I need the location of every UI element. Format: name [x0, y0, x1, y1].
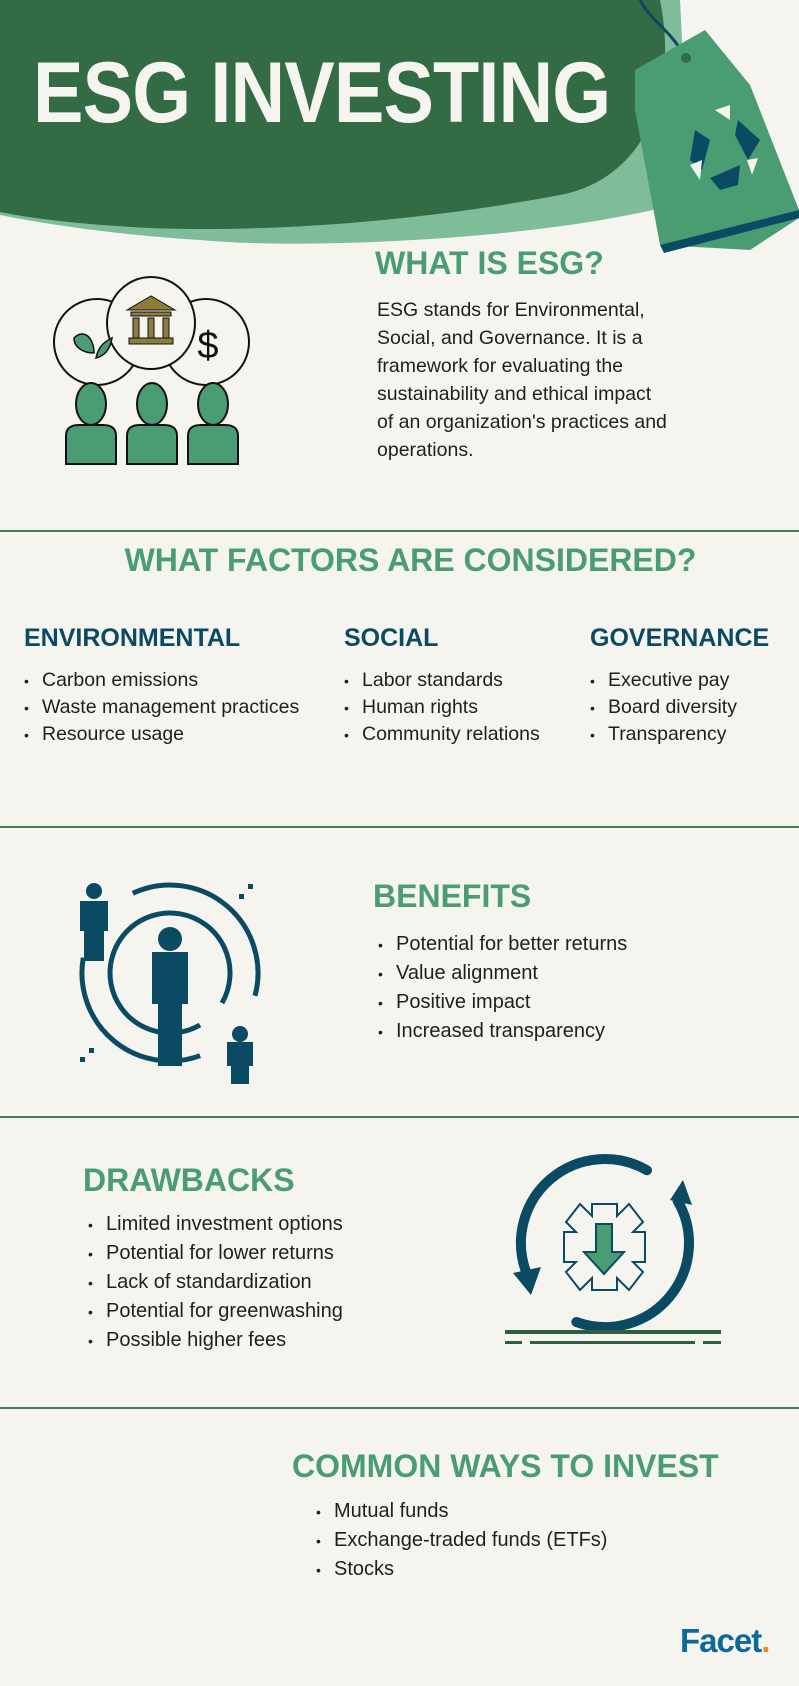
list: drawbacks: Limited investment options — [106, 1213, 343, 1235]
column: governance — [590, 624, 769, 745]
list: benefits — [378, 933, 627, 1042]
column: environmental — [24, 624, 299, 745]
logo: facet: Facet. — [680, 1622, 769, 1659]
column: governance: Board diversity — [608, 696, 737, 718]
list: ways to invest: Stocks — [334, 1558, 394, 1580]
icon: gear with cycle arrows — [505, 1154, 721, 1344]
list: drawbacks: Lack of standardization — [106, 1271, 312, 1293]
column: environmental: Resource usage — [42, 723, 184, 745]
column: governance: Executive pay — [608, 669, 729, 691]
column: social: SOCIAL — [344, 624, 438, 652]
title: ESG INVESTING — [33, 45, 610, 141]
list: drawbacks: Possible higher fees — [106, 1329, 286, 1351]
icon: recycle tag — [635, 0, 799, 253]
heading: benefits: BENEFITS — [373, 878, 531, 914]
list: benefits: Value alignment — [396, 962, 538, 984]
column: social — [344, 624, 540, 745]
heading: factors: WHAT FACTORS ARE CONSIDERED? — [125, 542, 696, 578]
heading: what is esg: WHAT IS ESG? — [375, 245, 604, 281]
column: governance: Transparency — [608, 723, 726, 745]
column: social: Community relations — [362, 723, 540, 745]
column: environmental: Carbon emissions — [42, 669, 198, 691]
icon: person in circles — [79, 882, 261, 1084]
icon: ESG people and circles: $ — [197, 325, 219, 367]
list: ways to invest: Exchange-traded funds (ETFs) — [334, 1529, 607, 1551]
heading: drawbacks: DRAWBACKS — [83, 1162, 295, 1198]
list: benefits: Increased transparency — [396, 1020, 605, 1042]
list: ways to invest — [316, 1500, 607, 1580]
column: environmental: ENVIRONMENTAL — [24, 624, 240, 652]
column: social: Human rights — [362, 696, 478, 718]
heading: common ways: COMMON WAYS TO INVEST — [292, 1448, 719, 1484]
list: drawbacks: Potential for lower returns — [106, 1242, 334, 1264]
text: esg definition: ESG stands for Environmental, Social, and Governance. It is a framework for evaluating the sustainability and ethical impact of an organization's practices and operations. — [377, 299, 667, 461]
icon: ESG people and circles — [53, 276, 250, 465]
list: drawbacks: Potential for greenwashing — [106, 1300, 343, 1322]
list: drawbacks — [88, 1213, 343, 1351]
column: environmental: Waste management practices — [42, 696, 299, 718]
list: benefits: Positive impact — [396, 991, 530, 1013]
header banner — [0, 0, 682, 244]
list: ways to invest: Mutual funds — [334, 1500, 449, 1522]
column: governance: GOVERNANCE — [590, 624, 769, 652]
list: benefits: Potential for better returns — [396, 933, 627, 955]
column: social: Labor standards — [362, 669, 503, 691]
